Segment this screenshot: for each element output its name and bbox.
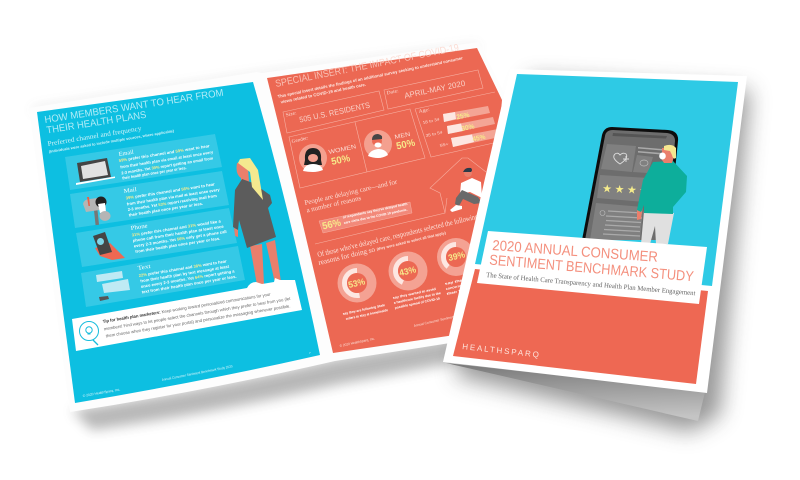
text: email: Email xyxy=(118,150,134,158)
text: tip: Tip for health plan marketers: Keep working toward personalized communications for your xyxy=(102,291,271,324)
box: gender xyxy=(289,109,425,188)
heading: special insert: SPECIAL INSERT: THE IMPACT OF COVID-19 xyxy=(274,42,460,90)
icon: man with mask xyxy=(364,130,392,158)
title banner xyxy=(477,231,707,304)
text: mail: from their health plan via mail at least once every xyxy=(126,187,221,206)
donut chart: 39 percent: 39% xyxy=(447,249,466,263)
callout: tip for health plan marketers xyxy=(72,278,302,351)
footer: left page: 7 xyxy=(309,351,311,355)
heading: how members want to hear: HOW MEMBERS WANT TO HEAR FROM xyxy=(44,88,224,126)
donut chart: 53 percent xyxy=(338,264,376,302)
donut caption: 39 percent: say they are xyxy=(444,276,475,286)
text: email: their health plan once per year or less. xyxy=(122,165,187,180)
text: of those who've delayed care: Of those who've delayed care, respondents selected the following xyxy=(316,212,479,259)
women 50 percent: WOMEN xyxy=(328,144,357,156)
icon: chat bubbles xyxy=(96,271,130,301)
cover white paper xyxy=(443,69,747,393)
donut chart: 39 percent xyxy=(437,238,475,276)
icon: heart card xyxy=(601,144,636,172)
text: phone: phone call from their health plan at least once xyxy=(132,224,225,243)
donut caption: 39 percent xyxy=(444,276,477,296)
intro text: views related to COVID-19 and health care. xyxy=(280,82,366,104)
bar: 18 to 34 xyxy=(422,106,490,125)
women 50 percent: 50% xyxy=(330,153,351,168)
text: people are delaying care: a number of reasons xyxy=(306,194,362,214)
text: text message: once every 2-3 months. Yet 64% report getting a xyxy=(140,268,236,289)
text: text message: Text xyxy=(137,264,152,272)
text: text message: from their health plan by text message at least xyxy=(140,264,230,283)
text: of those who've delayed care: (they were asked to select all that apply) xyxy=(376,231,447,251)
text: phone: Phone xyxy=(130,223,148,232)
box: size: Size: xyxy=(285,111,297,118)
bar: 35 to 54 xyxy=(425,117,495,138)
text: text message xyxy=(137,258,237,294)
panel: left page, how members want to hear xyxy=(37,82,320,403)
callout: 56 percent: of respondents say they've delayed health xyxy=(342,202,408,219)
logo: healthsparq: HEALTHSPARQ xyxy=(462,342,539,359)
cover blue area xyxy=(475,74,738,286)
footer: left page: Annual Consumer Sentiment Benchmark Study 2020 xyxy=(161,364,233,382)
bar: 55 plus xyxy=(439,129,500,148)
panel: phone xyxy=(76,208,237,267)
icon: mailbox xyxy=(83,196,110,225)
donut caption: 39 percent: their family's xyxy=(446,286,477,296)
donut chart: 43 percent: 43% xyxy=(398,264,417,278)
donut caption: 43 percent: a healthcare facility due to the xyxy=(393,291,441,305)
donut caption: 53 percent xyxy=(342,303,388,321)
panel: mail xyxy=(70,171,229,228)
icon: laptop xyxy=(76,158,115,185)
heading: cover title: 2020 ANNUAL CONSUMER xyxy=(492,238,658,266)
back page of folded cover xyxy=(446,363,705,421)
heading: cover title: SENTIMENT BENCHMARK STUDY xyxy=(489,253,695,285)
subheading: cover: The State of Health Care Transparency and Health Plan Member Engagement xyxy=(486,271,696,297)
white paper of spread xyxy=(29,42,506,412)
footer: left page: © 2020 HealthSparq, Inc. xyxy=(82,387,121,398)
illustration: woman with blonde hair xyxy=(233,158,281,285)
women 50 percent xyxy=(328,144,357,168)
footer: right page xyxy=(339,315,455,348)
box: date xyxy=(384,70,483,109)
heading: how members want to hear: THEIR HEALTH PLANS xyxy=(46,110,148,136)
box: gender: Gender: xyxy=(291,136,309,145)
bar: 55 plus: 55+ xyxy=(439,141,450,148)
text: text message: 22% prefer this channel and 38% want to hear xyxy=(138,258,227,278)
callout: 56 percent: care visits due to the COVID-19 pandemic. xyxy=(343,208,408,225)
drop shadow: cover xyxy=(455,78,750,432)
panel: email xyxy=(65,134,222,190)
panel: text xyxy=(81,246,245,307)
text: phone: every 2-3 months. Yet 56% only get a phone call xyxy=(133,229,227,248)
star rating card: ★★★★ xyxy=(602,183,650,197)
box: size: 505 U.S. RESIDENTS xyxy=(299,101,371,124)
icon: magnifier with lightbulb xyxy=(80,322,98,345)
callout: 56 percent xyxy=(319,202,412,233)
illustration: person with mask looking at phone xyxy=(637,145,687,244)
donut caption: 39 percent: concerned about xyxy=(445,281,476,291)
box: date: Date: xyxy=(386,89,399,96)
donut caption: 43 percent: possible spread of COVID-19 xyxy=(394,296,440,310)
donut chart: 43 percent xyxy=(388,252,428,290)
cover coral band xyxy=(453,269,708,384)
donut caption: 53 percent: say they are following State xyxy=(342,303,385,316)
text: phone xyxy=(130,218,227,254)
callout: 56 percent: 56% xyxy=(321,218,342,232)
text: mail: 39% prefer this channel and 56% want to hear xyxy=(125,181,215,200)
men 50 percent xyxy=(394,132,416,152)
text: people are delaying care: People are delaying care—and for xyxy=(304,178,399,207)
donut chart: 53 percent: 53% xyxy=(347,276,366,290)
donut caption: 53 percent: orders to stay at home/inside xyxy=(345,308,388,321)
box: age bar chart xyxy=(415,92,500,157)
intro text: This special insert details the findings of an additional survey seeking to understand consumer xyxy=(277,55,464,99)
text: mail xyxy=(123,181,221,217)
text: email: 2-3 months. Yet 39% report getting an email from xyxy=(121,155,214,175)
footer: left page xyxy=(82,351,311,398)
illustration: smartphone xyxy=(582,127,678,240)
men 50 percent: MEN xyxy=(394,132,411,141)
footer: right page: Annual Consumer Sentiment xyxy=(413,315,455,328)
illustration: house outline and sitting man xyxy=(315,158,486,244)
text: email: 59% prefer this channel and 59% want to hear xyxy=(118,143,210,163)
box: size xyxy=(283,91,384,133)
icon: chat card xyxy=(633,155,653,173)
text: tip: them choose when they register for your portal) and personalize the messaging whenever possible. xyxy=(105,303,291,338)
text: text message: text from their health plan once per year or less. xyxy=(141,274,237,294)
text: of those who've delayed care: reasons for doing so xyxy=(317,245,376,267)
bar: 18 to 34: 25% xyxy=(456,112,471,121)
donut caption: 43 percent xyxy=(392,287,441,310)
bar: 55 plus: 45% xyxy=(472,134,487,143)
text: of those who've delayed care xyxy=(316,212,479,267)
icon: phone in hand xyxy=(93,232,125,260)
text: mail: 2-3 months. Yet 53% report receiving mail from xyxy=(127,193,217,212)
drop shadow: open spread xyxy=(30,44,480,430)
text: mail: their health plan once per year or less. xyxy=(128,201,203,217)
donut caption: 43 percent: say they wanted to avoid xyxy=(392,287,436,300)
right page background xyxy=(267,48,502,353)
bar: 18 to 34: 18 to 34 xyxy=(422,116,441,125)
subheading: preferred channel: Preferred channel and frequency xyxy=(47,124,143,148)
box: date: APRIL-MAY 2020 xyxy=(404,79,467,100)
subheading: preferred channel: (Individuals were asked to include multiple sources, where applicable) xyxy=(49,129,175,154)
panel: right page, special insert xyxy=(267,42,502,353)
icon: woman with mask xyxy=(299,144,327,172)
bar: 35 to 54: 30% xyxy=(461,123,476,133)
left page background xyxy=(37,82,320,403)
panel: cover xyxy=(443,69,747,393)
box: age bar chart: Age: xyxy=(418,108,430,115)
text: tip: members! Find ways to let people select the channels through which they prefer to hear from you (let xyxy=(103,296,291,331)
open spread page xyxy=(29,42,506,412)
text: phone: from their health plan once per year or less. xyxy=(135,236,221,254)
text: mail: Mail xyxy=(123,187,138,195)
text: phone: 31% prefer this channel and 31% would like a xyxy=(131,218,222,237)
text: email: from their health plan via email at least once every xyxy=(120,149,214,169)
bar: 35 to 54: 35 to 54 xyxy=(425,129,444,138)
heading: cover title xyxy=(489,238,695,285)
men 50 percent: 50% xyxy=(395,138,416,152)
list card xyxy=(590,203,643,240)
text: email xyxy=(118,143,214,180)
footer: right page: © 2020 HealthSparq, Inc. xyxy=(339,337,375,348)
